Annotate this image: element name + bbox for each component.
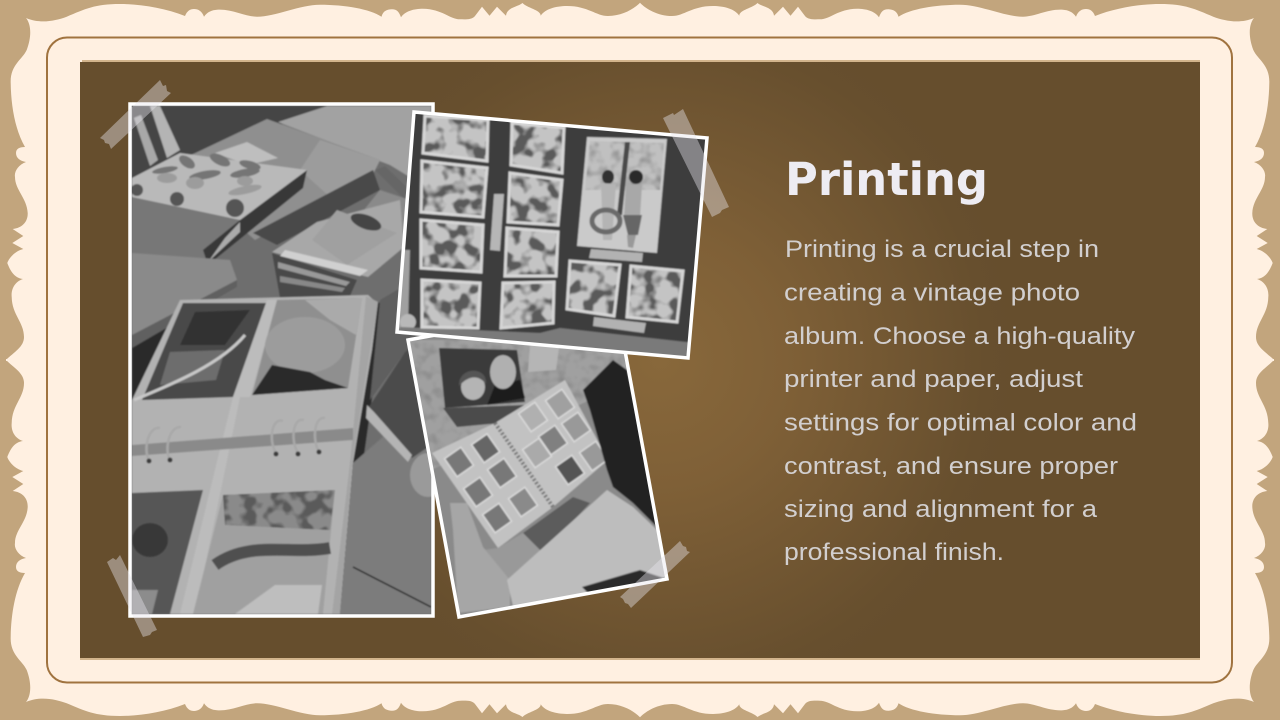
body text: sizing and alignment for a bbox=[784, 496, 1098, 523]
brown panel bbox=[80, 60, 1200, 660]
body text: contrast, and ensure proper bbox=[784, 453, 1118, 480]
body text: printer and paper, adjust bbox=[784, 366, 1083, 393]
body text: professional finish. bbox=[784, 539, 1004, 566]
photo: person viewing album bbox=[408, 302, 667, 617]
body text: settings for optimal color and bbox=[784, 410, 1137, 436]
photo: albums on table bbox=[130, 104, 446, 616]
tape: top right bbox=[663, 109, 729, 217]
photo: scrapbook page with pictures bbox=[396, 112, 707, 360]
body text: album. Choose a high-quality bbox=[784, 323, 1135, 350]
tape: top left bbox=[100, 80, 171, 149]
body text: Printing is a crucial step in bbox=[785, 236, 1099, 263]
photo border bbox=[130, 104, 433, 616]
tape: bottom left bbox=[107, 555, 157, 637]
tape: bottom right bbox=[620, 541, 690, 608]
body text: creating a vintage photo bbox=[784, 280, 1080, 306]
photo border bbox=[397, 112, 707, 358]
photo border bbox=[408, 302, 667, 617]
body text bbox=[784, 236, 1137, 566]
title: Printing bbox=[785, 153, 988, 206]
